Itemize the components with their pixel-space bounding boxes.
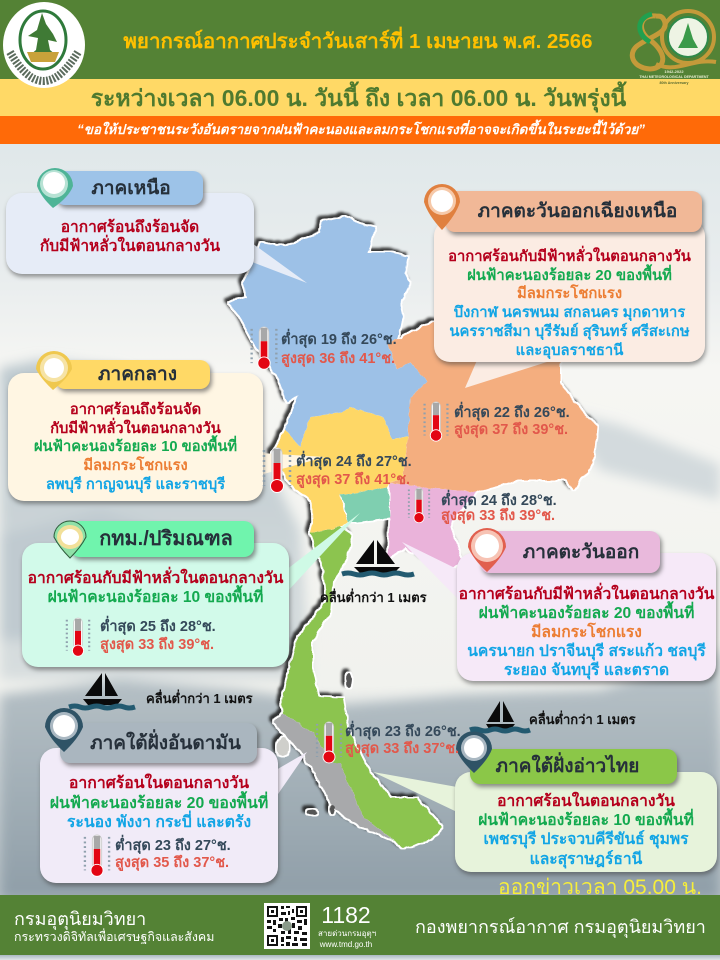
text lines: มีลมกระโชกแรง xyxy=(531,624,642,641)
panel: central xyxy=(6,351,325,507)
header xyxy=(445,191,702,232)
callout tail xyxy=(373,772,455,811)
text lines: ฝนฟ้าคะนองร้อยละ 10 ของพื้นที่ xyxy=(34,439,237,455)
orange warning band xyxy=(0,116,720,144)
forecast division name: กองพยากรณ์อากาศ กรมอุตุนิยมวิทยา xyxy=(415,917,706,937)
footer band xyxy=(0,895,720,960)
temperatures: northeast xyxy=(454,402,570,438)
temperatures: northeast: สูงสุด 37 ถึง 39°ช. xyxy=(454,422,568,438)
temperatures: south: ต่ำสุด 23 ถึง 26°ช. xyxy=(345,724,461,740)
icon: pin xyxy=(45,708,83,752)
icon: ministry logo xyxy=(3,2,85,88)
header: ภาคตะวันออกเฉียงเหนือ xyxy=(478,201,677,222)
header: ภาคใต้ฝั่งอันดามัน xyxy=(90,733,241,754)
icon: pin xyxy=(37,168,73,208)
temperatures: northeast: ต่ำสุด 22 ถึง 26°ช. xyxy=(454,405,570,421)
wave label: gulf top: คลื่นต่ำกว่า 1 เมตร xyxy=(320,590,427,605)
callout tail xyxy=(402,542,457,597)
header xyxy=(60,723,257,763)
panel: gulf of thailand xyxy=(373,731,720,878)
temperatures: andaman: ต่ำสุด 23 ถึง 27°ช. xyxy=(115,838,231,854)
text lines xyxy=(448,246,691,359)
text box xyxy=(40,748,278,883)
header: ภาคตะวันออก xyxy=(523,542,639,563)
header band xyxy=(0,0,720,144)
warning text: “ขอให้ประชาชนระวังอันตรายจากฝนฟ้าคะนองและลมกระโชกแรงที่อาจจะเกิดขึ้นในระยะนี้ไว้ด้วย” xyxy=(77,122,645,137)
text lines: กับมีฟ้าหลั่วในตอนกลางวัน xyxy=(50,421,221,437)
text box xyxy=(8,373,263,501)
hotline caption: สายด่วนกรมอุตุฯ xyxy=(318,929,376,938)
text lines: นครราชสีมา บุรีรัมย์ สุรินทร์ ศรีสะเกษ xyxy=(449,324,690,340)
panel: andaman xyxy=(38,708,307,888)
text lines: อากาศร้อนในตอนกลางวัน xyxy=(69,775,249,792)
text box xyxy=(22,543,289,667)
region: central xyxy=(272,407,408,533)
region: north xyxy=(228,217,427,447)
wave label: gulf bottom: คลื่นต่ำกว่า 1 เมตร xyxy=(529,712,636,727)
text lines: และสุราษฎร์ธานี xyxy=(530,851,642,868)
icon: QR code xyxy=(264,903,310,949)
text lines: มีลมกระโชกแรง xyxy=(517,286,622,302)
text lines xyxy=(478,792,694,868)
icon: 80th anniversary logo: THAI METEOROLOGICAL DEPARTMENT xyxy=(639,75,709,79)
text box xyxy=(455,772,717,872)
temperatures: east: ต่ำสุด 24 ถึง 28°ช. xyxy=(441,493,557,509)
text lines xyxy=(459,582,714,680)
yellow sub-header xyxy=(0,79,720,116)
region: bangkok xyxy=(340,487,390,522)
text lines: ระนอง พังงา กระบี่ และตรัง xyxy=(67,814,251,831)
text box xyxy=(457,553,716,681)
hotline number: 1182 xyxy=(321,902,371,928)
callout tail xyxy=(253,244,307,283)
temperatures: east xyxy=(441,490,557,524)
icon: pin xyxy=(424,184,460,230)
text box xyxy=(434,220,705,362)
period heading: ระหว่างเวลา 06.00 น. วันนี้ ถึง เวลา 06.00 น. วันพรุ่งนี้ xyxy=(91,85,626,111)
ministry name: กระทรวงดิจิทัลเพื่อเศรษฐกิจและสังคม xyxy=(14,930,214,944)
text lines: นครนายก ปราจีนบุรี สระแก้ว ชลบุรี xyxy=(467,643,706,660)
header: ภาคกลาง xyxy=(98,364,177,385)
text lines: มีลมกระโชกแรง xyxy=(83,458,188,474)
panel: northeast xyxy=(424,184,709,388)
icon: pin xyxy=(468,528,506,572)
text lines: ฝนฟ้าคะนองร้อยละ 10 ของพื้นที่ xyxy=(48,589,263,606)
text lines: กับมีฟ้าหลั่วในตอนกลางวัน xyxy=(40,238,220,255)
temperatures: bangkok: สูงสุด 33 ถึง 39°ช. xyxy=(100,637,214,653)
icon: boat andaman xyxy=(69,673,135,708)
issue time: ออกข่าวเวลา 05.00 น. xyxy=(498,876,702,899)
callout tail xyxy=(278,752,307,794)
text lines: อากาศร้อนกับมีฟ้าหลั่วในตอนกลางวัน xyxy=(459,586,714,603)
text lines: และอุบลราชธานี xyxy=(516,343,623,359)
temperatures: north: ต่ำสุด 19 ถึง 26°ช. xyxy=(281,332,397,348)
header: ภาคเหนือ xyxy=(91,178,171,199)
region: south gulf xyxy=(282,527,442,848)
text box xyxy=(6,193,254,274)
thermometer: bangkok xyxy=(67,618,89,656)
text lines: อากาศร้อนในตอนกลางวัน xyxy=(497,793,675,810)
hotline caption xyxy=(318,929,376,949)
islands xyxy=(277,673,352,815)
thermometer: south xyxy=(317,722,341,763)
text lines: เพชรบุรี ประจวบคีรีขันธ์ ชุมพร xyxy=(483,831,689,848)
region: northeast xyxy=(388,322,597,492)
region: south andaman xyxy=(274,713,393,840)
text lines: บึงกาฬ นครพนม สกลนคร มุกดาหาร xyxy=(454,305,685,321)
temperatures: bangkok xyxy=(100,616,216,653)
temperatures: bangkok: ต่ำสุด 25 ถึง 28°ช. xyxy=(100,619,216,635)
thermometer: andaman xyxy=(85,835,109,876)
text lines: ลพบุรี กาญจนบุรี และราชบุรี xyxy=(46,477,225,493)
text lines: ฝนฟ้าคะนองร้อยละ 20 ของพื้นที่ xyxy=(467,268,672,284)
temperatures: north xyxy=(281,328,397,367)
text lines xyxy=(28,566,284,606)
icon: pin xyxy=(36,351,72,390)
temperatures: andaman xyxy=(115,834,231,871)
panel: north xyxy=(4,168,307,283)
text lines: ฝนฟ้าคะนองร้อยละ 10 ของพื้นที่ xyxy=(478,812,694,829)
icon: boat gulf top xyxy=(342,540,414,575)
callout tail xyxy=(289,513,360,590)
icon: 80th anniversary logo xyxy=(630,9,716,85)
text lines: อากาศร้อนกับมีฟ้าหลั่วในตอนกลางวัน xyxy=(448,249,691,265)
thermometer: central xyxy=(264,448,290,492)
header xyxy=(55,360,210,389)
region: east xyxy=(388,483,477,570)
temperatures: east: สูงสุด 33 ถึง 39°ช. xyxy=(441,508,555,524)
temperatures: andaman: สูงสุด 35 ถึง 37°ช. xyxy=(115,854,229,870)
text lines xyxy=(40,218,220,255)
temperatures: south: สูงสุด 33 ถึง 37°ช. xyxy=(345,741,459,757)
text lines: อากาศร้อนถึงร้อนจัด xyxy=(61,219,199,236)
text lines: ระยอง จันทบุรี และตราด xyxy=(504,662,669,679)
icon: pin xyxy=(456,731,492,773)
text lines xyxy=(50,774,268,831)
hotline caption: www.tmd.go.th xyxy=(320,940,372,949)
temperatures: central: ต่ำสุด 24 ถึง 27°ช. xyxy=(296,454,412,470)
thermometer: north xyxy=(252,327,276,369)
header: ภาคใต้ฝั่งอ่าวไทย xyxy=(496,756,639,777)
thermometer: east xyxy=(409,488,429,523)
header xyxy=(480,531,660,573)
header xyxy=(70,521,254,557)
temperatures: central: สูงสุด 37 ถึง 41°ช. xyxy=(296,472,410,488)
thermometer: northeast xyxy=(425,402,447,441)
wave label: andaman: คลื่นต่ำกว่า 1 เมตร xyxy=(146,691,253,706)
icon: pin xyxy=(54,520,86,559)
temperatures: north: สูงสุด 36 ถึง 41°ช. xyxy=(281,350,395,366)
text lines: อากาศร้อนถึงร้อนจัด xyxy=(70,402,201,418)
department name: กรมอุตุนิยมวิทยา xyxy=(14,909,146,929)
text lines: ฝนฟ้าคะนองร้อยละ 20 ของพื้นที่ xyxy=(479,605,694,622)
title: พยากรณ์อากาศประจำวันเสาร์ที่ 1 เมษายน พ.ศ. 2566 xyxy=(123,30,593,53)
panel: east xyxy=(402,528,720,687)
temperatures: central xyxy=(296,450,412,488)
header: กทม./ปริมณฑล xyxy=(99,528,233,550)
header xyxy=(55,171,203,205)
panel: bangkok xyxy=(20,513,360,673)
temperatures: south xyxy=(345,720,461,757)
text lines xyxy=(34,402,237,493)
text lines: อากาศร้อนกับมีฟ้าหลั่วในตอนกลางวัน xyxy=(28,570,283,587)
icon: 80th anniversary logo: 80th Anniversary xyxy=(659,81,689,85)
header xyxy=(470,749,677,784)
callout tail xyxy=(263,453,325,474)
callout tail xyxy=(465,362,546,388)
icon: boat gulf bottom xyxy=(470,701,530,731)
icon: 80th anniversary logo: 1942-2022 xyxy=(664,69,684,74)
text lines: ฝนฟ้าคะนองร้อยละ 20 ของพื้นที่ xyxy=(50,794,268,812)
